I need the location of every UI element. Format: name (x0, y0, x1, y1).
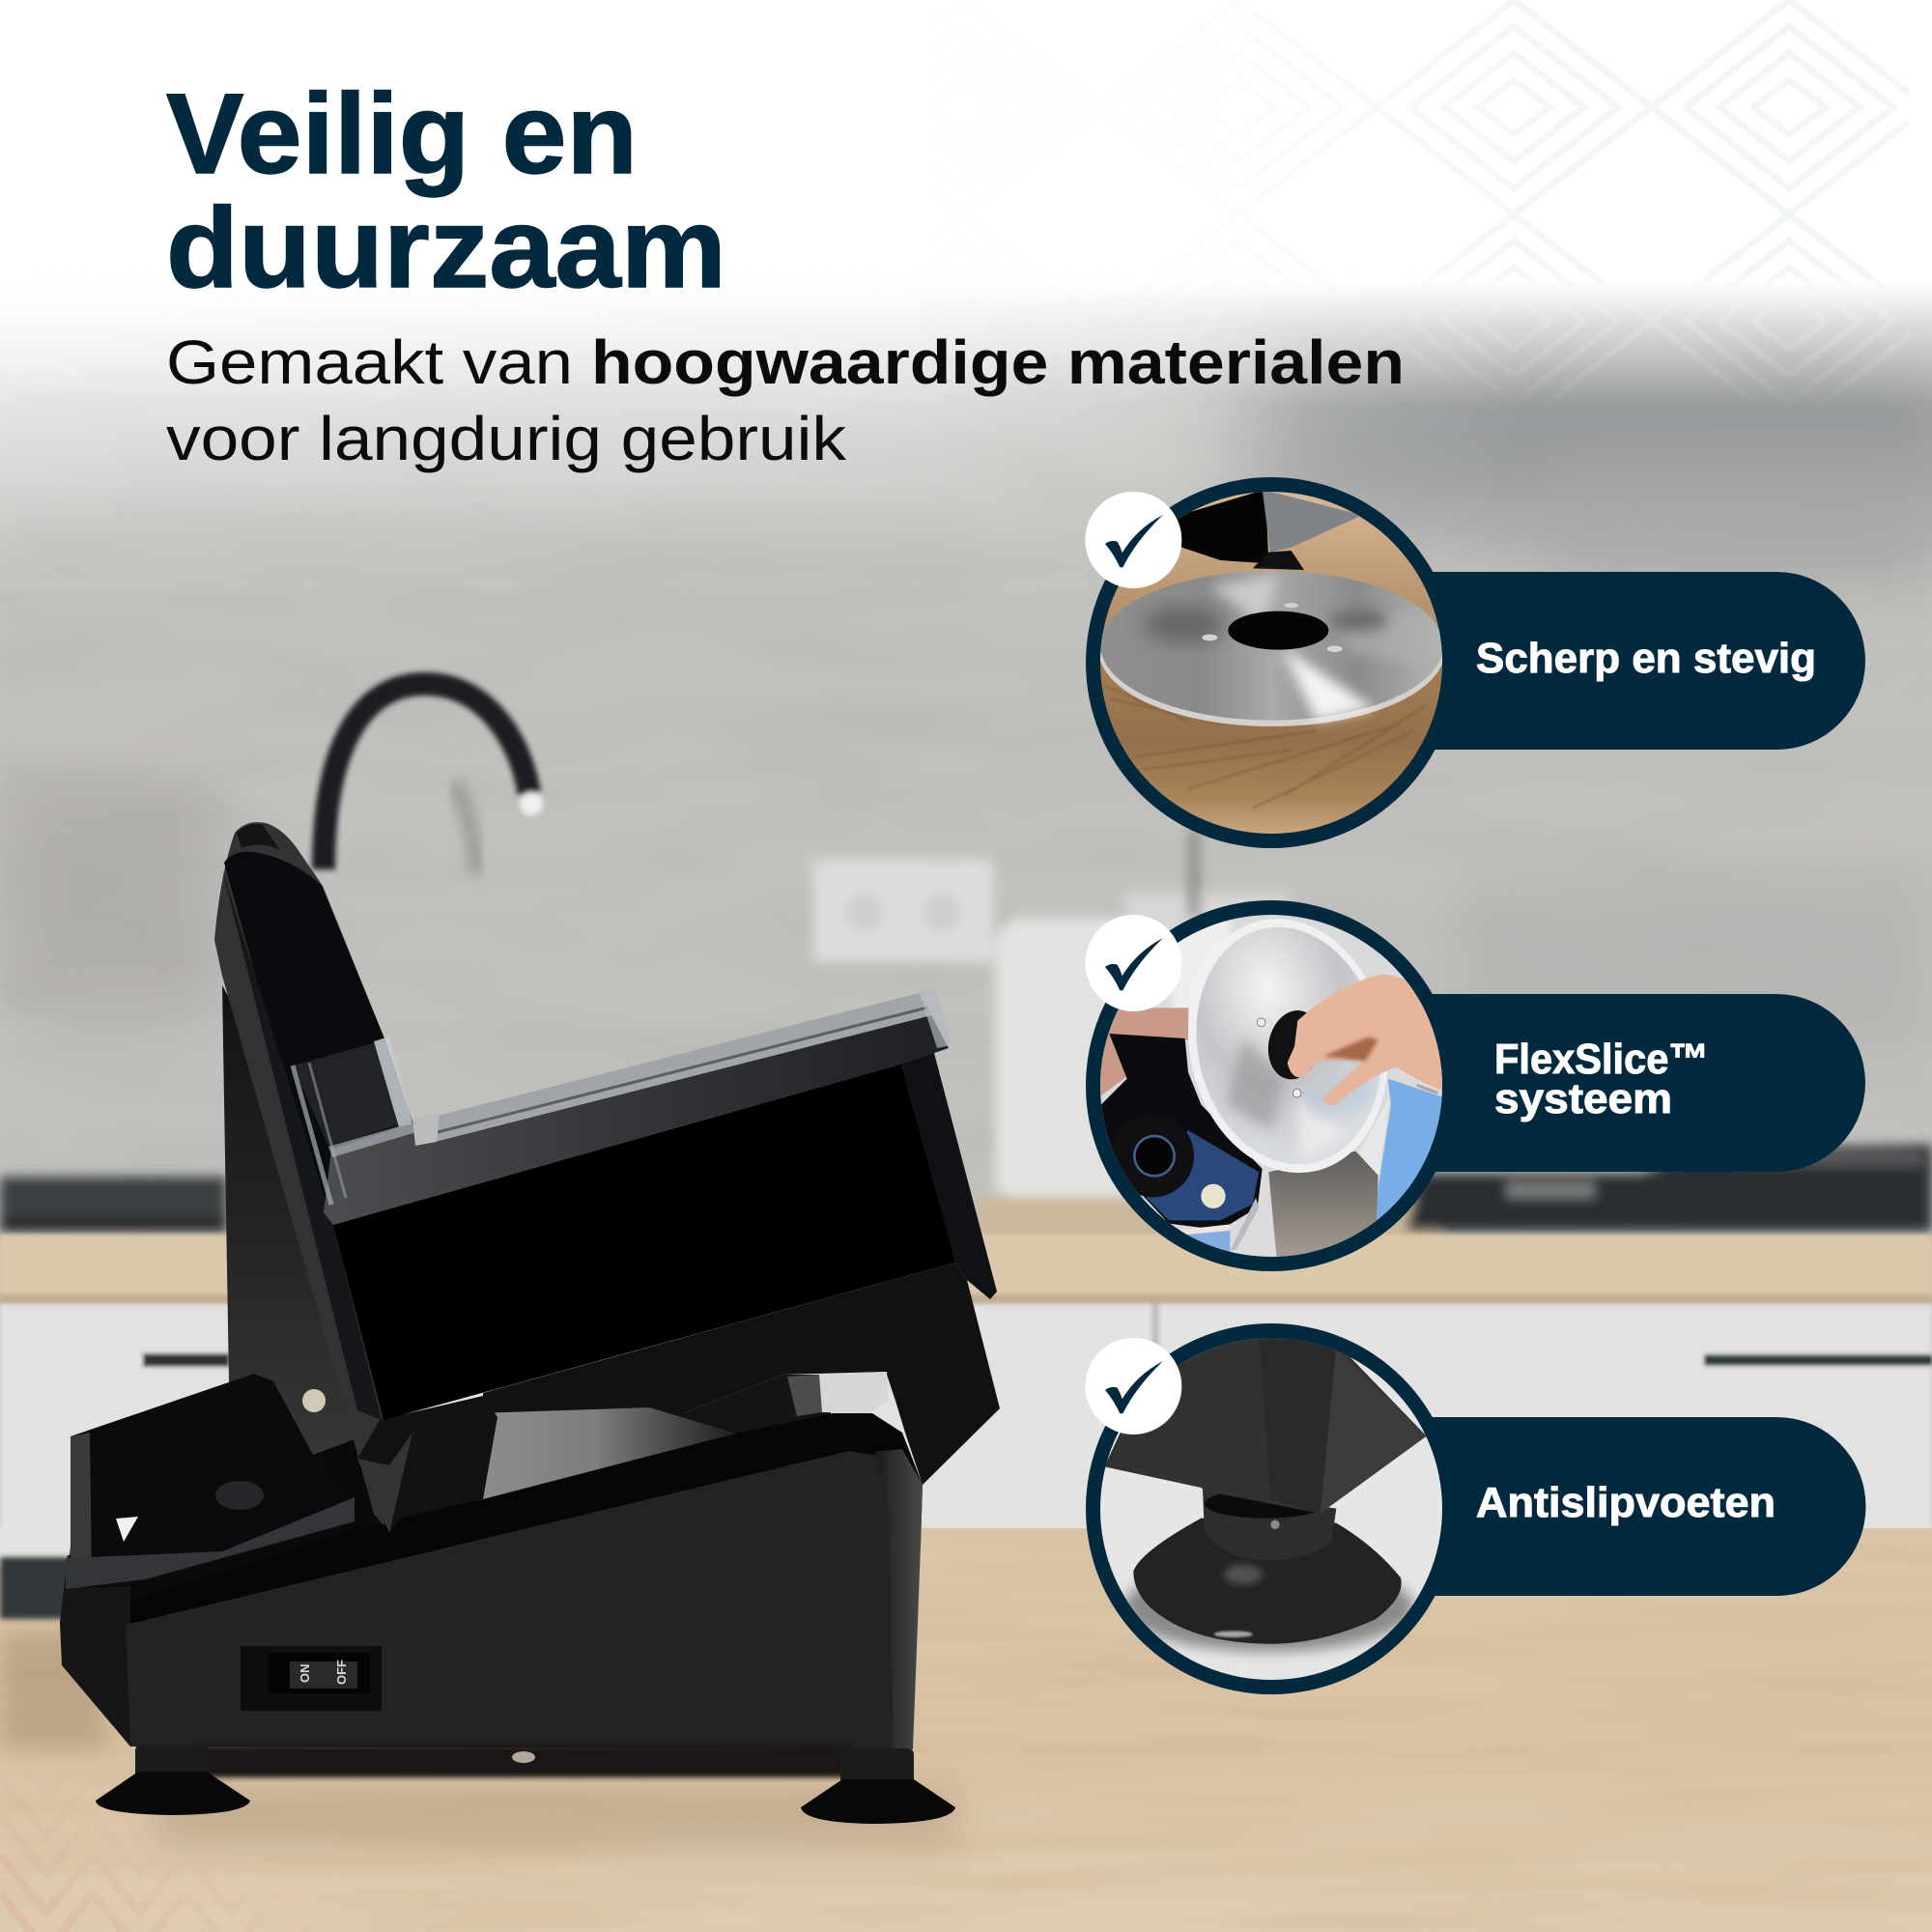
circular photo: blade (1086, 477, 1457, 848)
subtitle: Gemaakt van (166, 327, 573, 397)
dark shadow right of gap (649, 1375, 831, 1435)
power switch (241, 1646, 382, 1711)
gap under carriage (478, 1407, 739, 1502)
subtitle (166, 327, 1405, 473)
lower carriage (483, 1263, 1000, 1485)
tray (66, 1374, 355, 1589)
label text: Scherp en stevig (1476, 635, 1816, 682)
callout 3: anti-slip feet (1085, 1323, 1866, 1694)
product: black food slicer side view (60, 822, 1000, 1824)
carriage side plate (899, 1053, 997, 1299)
clear guard box (293, 1037, 440, 1205)
top rail (435, 987, 952, 1142)
power switch: ON (298, 1663, 312, 1683)
check badge (1085, 1338, 1181, 1435)
subtitle: voor langdurig gebruik (166, 404, 847, 473)
callout 1: sharp blade (1085, 477, 1865, 848)
transparent cover (324, 1015, 949, 1225)
screw (302, 1389, 326, 1412)
callout 2: FlexSlice system (1085, 900, 1865, 1271)
title (166, 71, 726, 312)
check badge (1085, 492, 1181, 588)
check badge (1085, 915, 1181, 1011)
title: Veilig en (166, 71, 638, 198)
right foot (801, 1748, 955, 1824)
label text (1494, 1036, 1709, 1122)
power switch: OFF (334, 1660, 349, 1685)
base front edge (874, 1449, 923, 1749)
title: duurzaam (166, 185, 726, 312)
label text: Antislipvoeten (1476, 1479, 1776, 1526)
circular photo: suction foot (1086, 1323, 1457, 1694)
wooden table (0, 1528, 1932, 1932)
upper base rail (126, 1413, 923, 1633)
pill label background (1420, 572, 1865, 750)
label text: systeem (1494, 1075, 1672, 1122)
label text: FlexSlice™ (1494, 1036, 1709, 1083)
rear housing (222, 985, 386, 1478)
dark underlay joining tray and base (62, 1420, 488, 1642)
white fade over top of photo (0, 0, 1932, 599)
background seen through gap (787, 1372, 889, 1416)
faucet (324, 684, 543, 874)
decorative chevron pattern top right (1418, 0, 1909, 280)
circular photo: removable blade (1086, 900, 1457, 1271)
pill label background (1420, 994, 1865, 1172)
base body (126, 1451, 909, 1749)
blade guard plate (214, 822, 425, 1533)
shadow under base (193, 1745, 850, 1777)
subtitle: hoogwaardige materialen (591, 327, 1405, 397)
left foot (96, 1745, 250, 1815)
base left side (60, 1555, 130, 1747)
counter and cabinets (0, 1235, 1932, 1536)
arm bracket (357, 1396, 497, 1533)
food table black face (333, 1063, 955, 1420)
pill label background (1420, 1417, 1866, 1596)
